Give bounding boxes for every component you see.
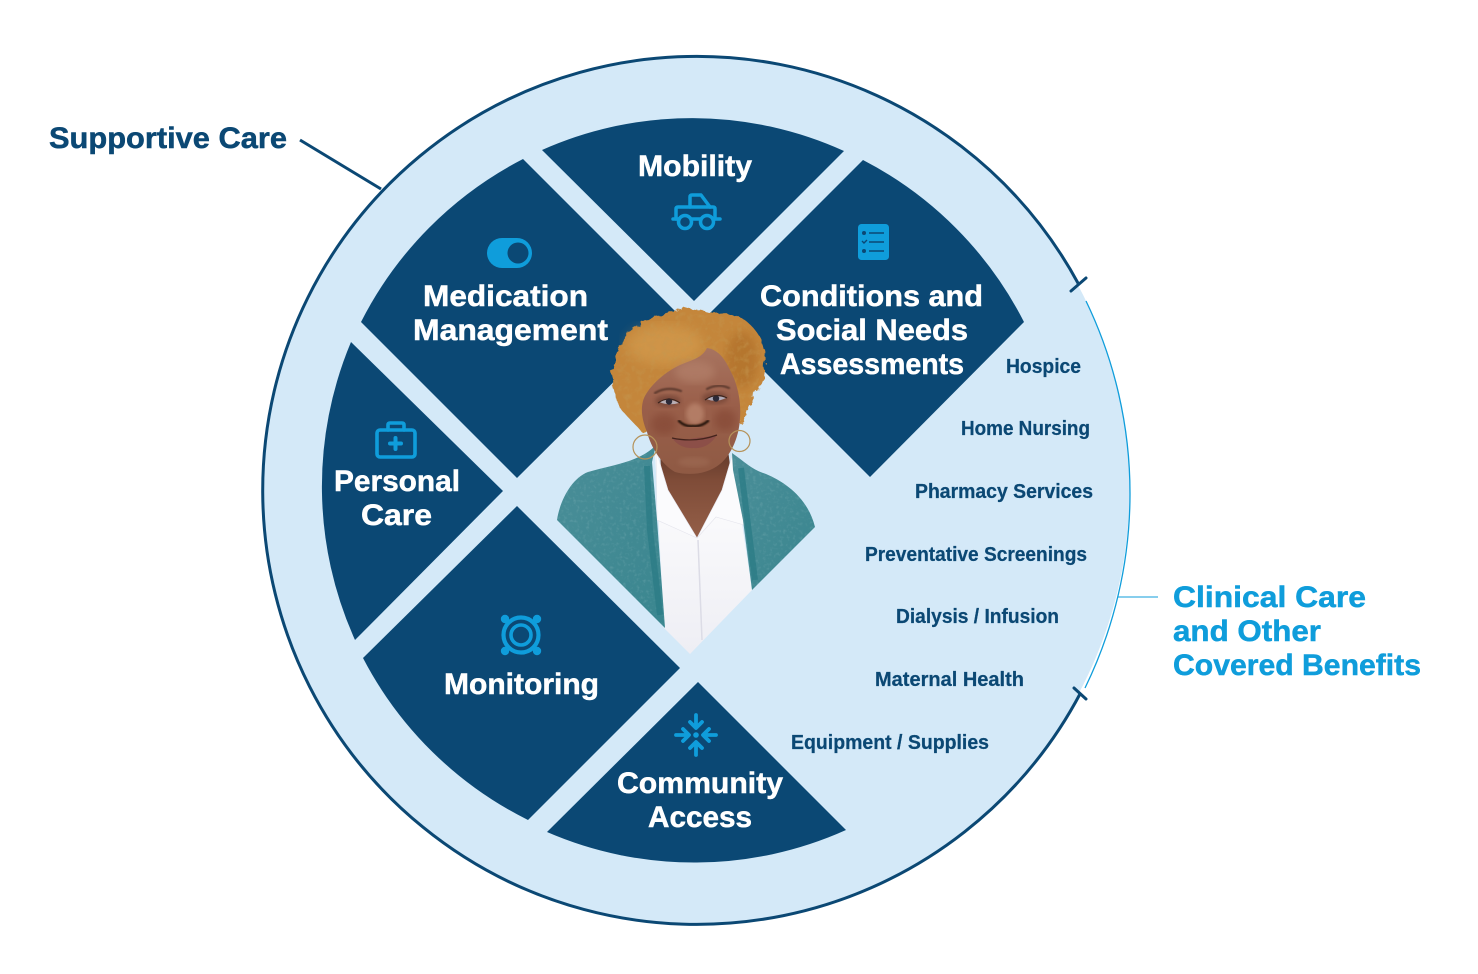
portrait cardigan left xyxy=(557,445,665,628)
portrait hair xyxy=(612,307,766,433)
icon: checklist clipboard xyxy=(858,224,889,260)
icon: first aid kit xyxy=(377,423,415,457)
portrait earrings xyxy=(633,430,750,459)
clinical care connector line xyxy=(1118,596,1158,598)
supportive care connector line xyxy=(300,140,381,189)
portrait eyebrows xyxy=(655,386,729,393)
panel: Monitoring: Monitoring xyxy=(444,668,599,701)
clinical care bracket arc xyxy=(1085,301,1130,688)
list: covered clinical benefits: Pharmacy Services xyxy=(915,481,1093,503)
panel: Mobility xyxy=(542,118,844,301)
panel: Medication Management xyxy=(361,159,680,478)
panel: Conditions and Social Needs Assessments: Social Needs xyxy=(776,314,968,347)
portrait shirt xyxy=(655,453,752,654)
heading: Supportive Care: Supportive Care xyxy=(49,122,287,155)
panel: Community Access: Community xyxy=(617,767,783,800)
panel: Conditions and Social Needs Assessments: Conditions and xyxy=(760,280,983,313)
list: covered clinical benefits: Preventative Screenings xyxy=(865,544,1087,566)
panel: Conditions and Social Needs Assessments: Assessments xyxy=(780,348,964,381)
panel: Community Access xyxy=(547,682,846,863)
panel: Community Access: Access xyxy=(648,801,752,834)
panel: Personal Care: Personal xyxy=(334,465,460,498)
panel: Personal Care: Care xyxy=(361,499,432,532)
heading: Clinical Care and Other Covered Benefits: and Other xyxy=(1173,615,1321,648)
panel: Medication Management: Medication xyxy=(423,280,588,313)
heading: Clinical Care and Other Covered Benefits: Clinical Care xyxy=(1173,581,1366,614)
panel: Personal Care xyxy=(322,342,503,640)
icon: arrows converging xyxy=(676,715,716,755)
portrait eyes xyxy=(655,392,728,407)
panel: Mobility: Mobility xyxy=(638,150,752,183)
icon: toggle switch xyxy=(487,238,532,268)
portrait: smiling woman in teal cardigan xyxy=(557,307,815,654)
list: covered clinical benefits xyxy=(791,356,1093,754)
portrait face xyxy=(642,348,740,474)
bottom tick mark xyxy=(1074,688,1086,699)
heading: Clinical Care and Other Covered Benefits: Covered Benefits xyxy=(1173,649,1421,682)
portrait shirt placket xyxy=(698,540,702,640)
list: covered clinical benefits: Maternal Health xyxy=(875,669,1024,691)
panel: outer supportive care circle xyxy=(264,57,1130,923)
supportive care outline arc xyxy=(263,56,1080,924)
list: covered clinical benefits: Equipment / Supplies xyxy=(791,732,989,754)
panel: Conditions and Social Needs Assessments xyxy=(708,160,1024,477)
icon: truck xyxy=(673,195,720,228)
portrait cardigan right xyxy=(732,453,815,590)
portrait smile xyxy=(672,435,717,448)
panel: Monitoring xyxy=(363,506,680,820)
portrait neck xyxy=(660,450,732,538)
top tick mark xyxy=(1071,278,1086,291)
list: covered clinical benefits: Hospice xyxy=(1006,356,1081,378)
heading: Clinical Care and Other Covered Benefits xyxy=(1173,581,1421,682)
icon: monitoring ring xyxy=(501,615,541,655)
list: covered clinical benefits: Dialysis / Infusion xyxy=(896,606,1059,628)
portrait collar xyxy=(656,450,744,538)
list: covered clinical benefits: Home Nursing xyxy=(961,418,1090,440)
panel: Medication Management: Management xyxy=(413,314,608,347)
portrait nose xyxy=(679,403,708,426)
